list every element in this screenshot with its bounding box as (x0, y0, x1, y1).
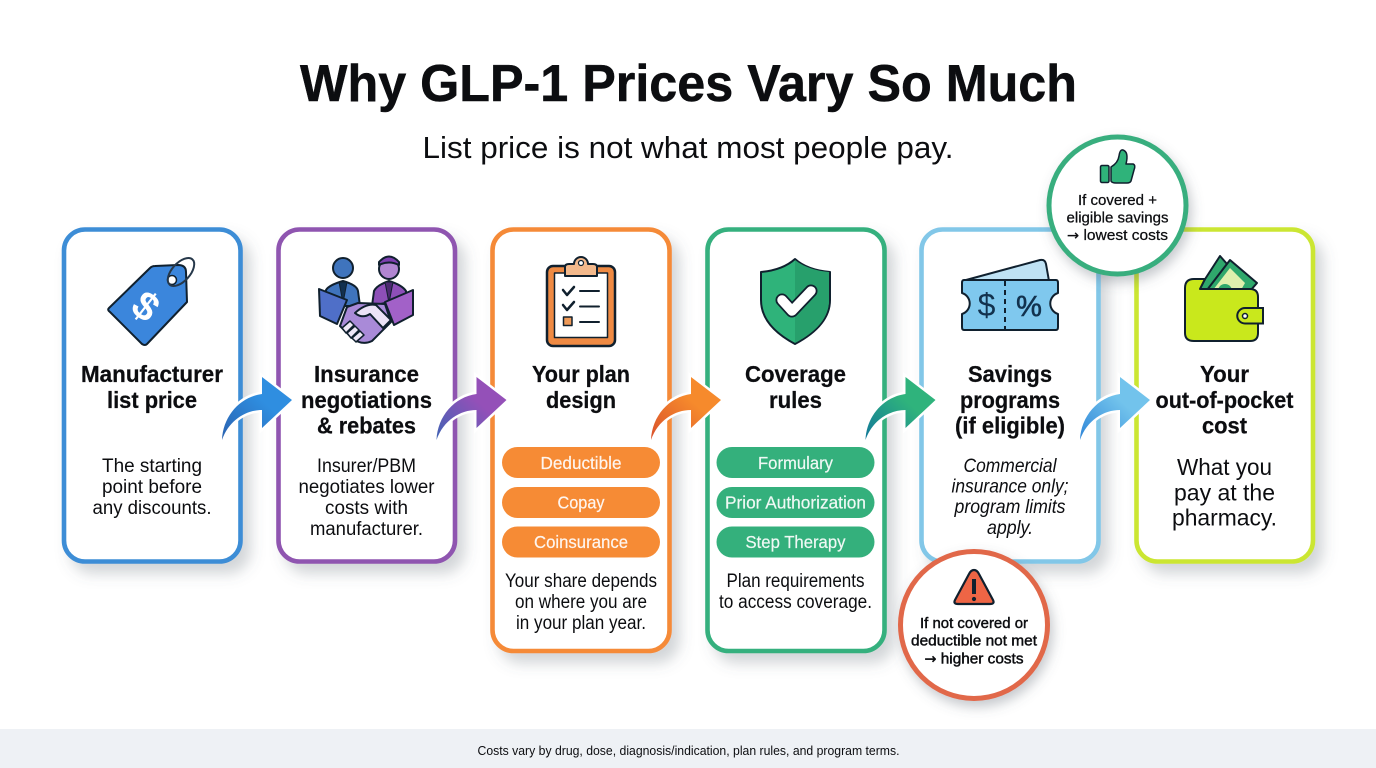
pill: coinsurance: Coinsurance (534, 532, 628, 552)
subtitle: List price is not what most people pay. (422, 130, 954, 165)
arrow: step 1 to 2 (222, 377, 292, 440)
description: to access coverage. (719, 592, 872, 613)
icon: shield (761, 259, 830, 344)
heading: list price (107, 387, 197, 413)
description: costs with (325, 498, 408, 519)
heading: programs (960, 387, 1060, 413)
pill: deductible: Deductible (540, 453, 622, 473)
icon: savings coupon: % (1016, 291, 1042, 323)
heading: negotiations (301, 387, 432, 413)
description: insurance only; (952, 476, 1068, 498)
pill: prior authorization: Prior Authorization (725, 492, 866, 512)
description (952, 456, 1068, 539)
icon: savings coupon: $ (978, 287, 996, 323)
heading: Manufacturer (81, 361, 223, 387)
callout text: deductible not met (911, 632, 1038, 650)
heading (532, 361, 630, 413)
callout text (911, 615, 1038, 668)
description: negotiates lower (298, 477, 435, 498)
description: point before (102, 477, 202, 498)
description: program limits (954, 497, 1066, 518)
pill: coinsurance (502, 526, 660, 558)
arrow: step 5 to 6 (1080, 377, 1150, 440)
heading: Savings (968, 361, 1052, 387)
heading: Your (1200, 361, 1249, 387)
callout text: → lowest costs (1067, 227, 1168, 244)
pill: step therapy: Step Therapy (746, 532, 846, 552)
panel: coverage rules (708, 230, 884, 651)
description (719, 571, 872, 613)
arrow: step 3 to 4 (651, 377, 721, 440)
heading: design (546, 387, 616, 413)
description: What you (1177, 454, 1272, 480)
description (92, 456, 212, 519)
icon: savings coupon (962, 260, 1058, 330)
title: Why GLP-1 Prices Vary So Much (300, 55, 1077, 113)
description (505, 571, 657, 634)
panel: manufacturer list price (64, 230, 240, 562)
icon: wallet (1185, 256, 1263, 341)
heading (955, 361, 1065, 438)
callout text: → higher costs (924, 650, 1024, 668)
heading: out-of-pocket (1156, 387, 1294, 413)
description: Commercial (964, 456, 1057, 477)
description: pay at the (1174, 480, 1275, 506)
description: in your plan year. (516, 613, 646, 634)
icon: warning triangle (954, 570, 994, 604)
description: pharmacy. (1172, 504, 1277, 530)
panel: insurance negotiations (278, 230, 455, 562)
pill: copay (502, 487, 660, 518)
callout text: If not covered or (920, 615, 1028, 632)
heading: cost (1202, 412, 1247, 438)
heading (1156, 361, 1294, 438)
description: Plan requirements (726, 571, 864, 592)
arrow: step 2 to 3 (436, 377, 506, 440)
heading (745, 361, 846, 413)
description: on where you are (515, 592, 647, 613)
pill: step therapy (716, 526, 874, 558)
pill: prior authorization (716, 487, 874, 518)
panel: your plan design (492, 230, 670, 651)
callout text: eligible savings (1066, 210, 1168, 226)
pill: copay: Copay (558, 492, 605, 512)
description: manufacturer. (310, 519, 423, 540)
heading: Your plan (532, 361, 630, 387)
description: apply. (987, 518, 1033, 539)
heading: Insurance (314, 361, 419, 387)
description: Insurer/PBM (317, 456, 416, 477)
description (1172, 454, 1277, 530)
heading: rules (769, 387, 822, 413)
description: Your share depends (505, 571, 657, 592)
heading: & rebates (317, 412, 416, 438)
heading (301, 361, 432, 438)
heading: (if eligible) (955, 412, 1065, 438)
callout text: If covered + (1078, 192, 1157, 209)
description: any discounts. (92, 498, 212, 519)
icon: handshake (319, 256, 413, 343)
footer (0, 729, 1376, 768)
icon: clipboard (547, 257, 615, 346)
description: The starting (102, 456, 202, 477)
heading: Coverage (745, 361, 846, 387)
panel: savings programs (922, 230, 1098, 562)
callout: higher costs (900, 552, 1048, 698)
callout: lowest costs (1049, 137, 1186, 274)
description (298, 456, 435, 540)
pill: formulary: Formulary (758, 453, 833, 473)
pill: formulary (716, 447, 874, 478)
pill: deductible (502, 447, 660, 478)
icon: thumbs up (1100, 150, 1135, 183)
icon: price tag: $ (123, 283, 168, 331)
panel: out-of-pocket cost (1136, 230, 1313, 562)
arrow: step 4 to 5 (866, 377, 936, 440)
icon: price tag (108, 253, 199, 345)
footer: Costs vary by drug, dose, diagnosis/indication, plan rules, and program terms. (478, 744, 900, 758)
callout text (1066, 192, 1168, 244)
heading (81, 361, 223, 413)
